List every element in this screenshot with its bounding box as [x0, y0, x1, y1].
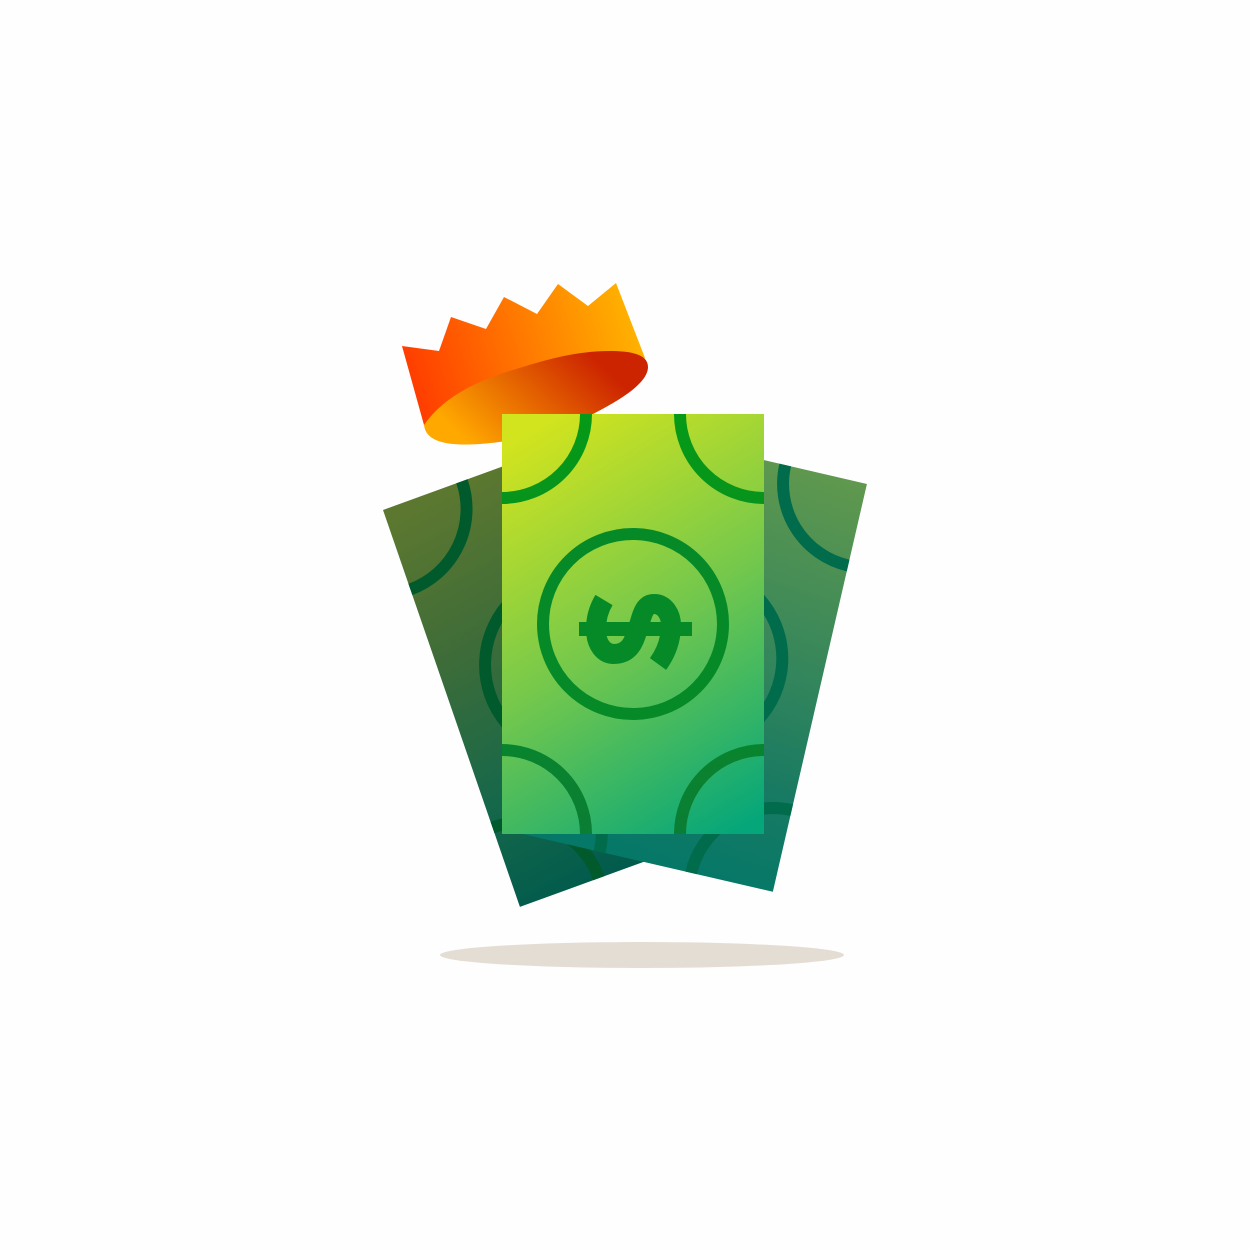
right bill arcs — [594, 464, 850, 874]
ground shadow — [440, 942, 844, 968]
illustration: money bills with crown — [383, 283, 867, 968]
left back bill — [383, 466, 644, 907]
front bill medallion ring — [543, 534, 723, 714]
crown inner ellipse — [424, 351, 648, 445]
crown outer band — [402, 283, 645, 425]
crown — [402, 283, 648, 445]
front bill corner arcs — [502, 414, 764, 834]
left bill arcs — [408, 479, 604, 880]
front bill — [502, 414, 764, 834]
right back bill — [524, 460, 867, 892]
icon: dollar sign — [579, 600, 692, 664]
